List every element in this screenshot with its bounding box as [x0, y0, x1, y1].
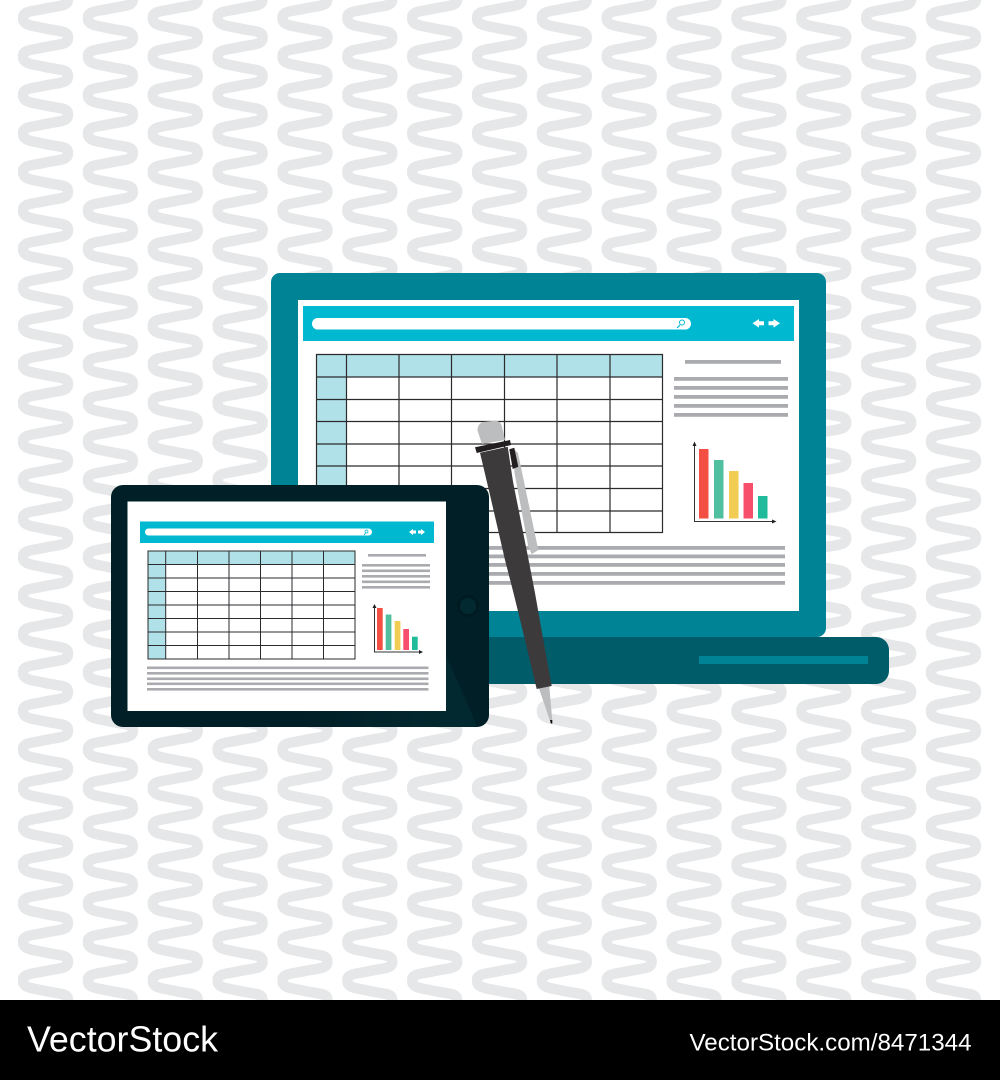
- tablet browser bar: [140, 522, 434, 543]
- laptop side text lines: [674, 360, 788, 417]
- tablet home button: [458, 596, 478, 616]
- tablet spreadsheet table: [148, 551, 355, 659]
- laptop browser bar: [303, 306, 794, 341]
- laptop base: [440, 637, 889, 684]
- laptop: [271, 273, 889, 684]
- laptop bar chart: [692, 442, 776, 524]
- laptop bottom text lines: [480, 546, 785, 585]
- pen collar: [475, 440, 511, 453]
- pen: [475, 421, 552, 724]
- footer image id text: VectorStock.com/8471344: [690, 1030, 972, 1056]
- footer bar: [0, 1000, 1000, 1080]
- tablet body: [111, 485, 489, 727]
- tablet: [111, 485, 489, 727]
- tablet bar chart: [372, 604, 423, 654]
- tablet bottom text lines: [147, 666, 428, 691]
- pen point: [550, 720, 552, 724]
- tablet shadow facet: [300, 656, 477, 727]
- pen push button: [477, 421, 505, 444]
- laptop lid: [271, 273, 826, 637]
- pen clip mount: [509, 448, 518, 469]
- laptop screen: [298, 300, 799, 611]
- tablet screen: [128, 502, 446, 711]
- pen tip: [539, 686, 552, 721]
- footer logo text: VectorStock: [27, 1019, 219, 1060]
- pen barrel: [480, 447, 552, 689]
- pen silver clip: [514, 450, 538, 554]
- tablet side text lines: [362, 554, 430, 589]
- laptop spreadsheet table: [316, 354, 662, 532]
